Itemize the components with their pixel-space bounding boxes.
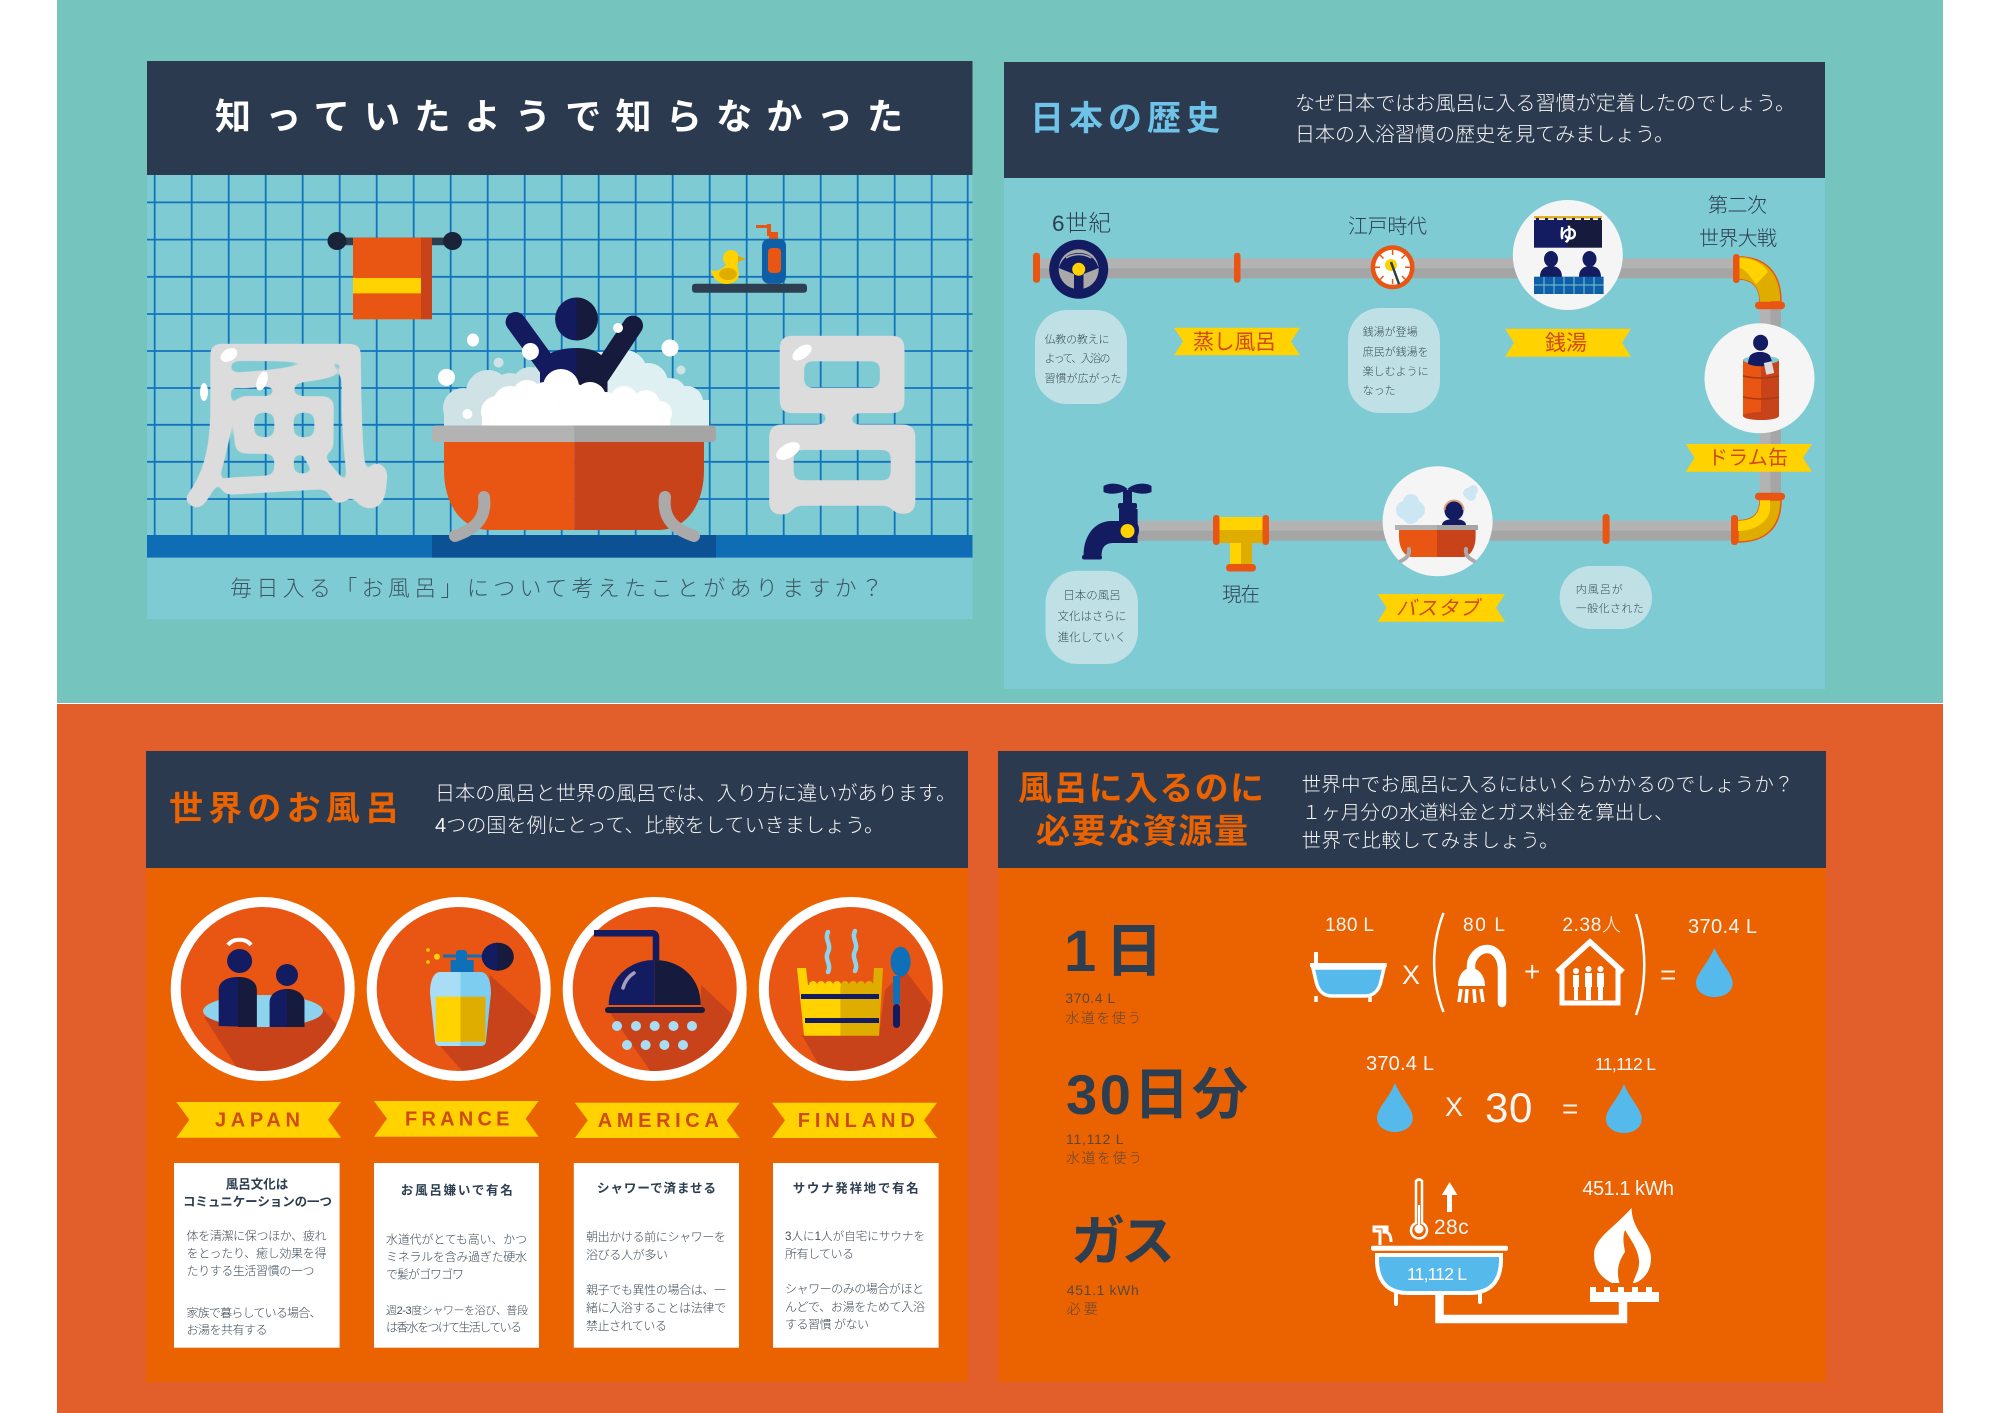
history header: なぜ日本ではお風呂に入る習慣が定着したのでしょう。: [1295, 92, 1795, 115]
icon: towel rail: [328, 232, 462, 319]
diagram: gas heating: 28c: [1434, 1216, 1469, 1239]
block: ガス: 必要: [1067, 1301, 1098, 1317]
icon: valve wheel: [1049, 240, 1108, 299]
ribbon: バスタブ: [1378, 594, 1505, 622]
bubble: 日本の風呂: [1046, 571, 1138, 664]
bubble: 銭湯が登場: [1348, 308, 1440, 413]
icon: Finland: [764, 902, 950, 1085]
card: Finland: [773, 1163, 939, 1348]
card: America: 緒に入浴することは法律で: [586, 1301, 726, 1315]
icon: bathtub circle: [1383, 466, 1493, 576]
ribbon: JAPAN: [176, 1102, 341, 1138]
card: America: シャワーで済ませる: [597, 1180, 716, 1196]
block: ガス: [1067, 1212, 1175, 1317]
title bar: 知っていたようで知らなかった: [215, 96, 903, 137]
icon: shower: [1458, 949, 1502, 1003]
card: France: 週2-3度シャワーを浴び、普段: [386, 1304, 528, 1317]
card: Finland: 3人に1人が自宅にサウナを: [785, 1230, 925, 1243]
bubble: 仏教: [1035, 310, 1127, 404]
ribbon: FRANCE: FRANCE: [405, 1108, 510, 1130]
bubble: 銭湯が登場: 楽しむように: [1363, 365, 1429, 378]
label: 第二次世界大戦: 世界大戦: [1699, 227, 1777, 250]
bubble: 仏教: 仏教の教えに: [1044, 332, 1110, 346]
card: America: 朝出かける前にシャワーを: [586, 1230, 726, 1244]
resources header: 世界で比較してみましょう。: [1302, 830, 1559, 852]
bubble: 内風呂: 内風呂が: [1576, 583, 1623, 596]
icon: water drop: [1696, 948, 1733, 997]
resources header: 風呂に入るのに: [1018, 770, 1264, 808]
ribbon: FINLAND: FINLAND: [798, 1110, 915, 1132]
bubble: 仏教: よって、入浴の: [1044, 352, 1110, 365]
card: Japan: をとったり、癒し効果を得: [186, 1246, 326, 1260]
formula: daily water: =: [1660, 959, 1676, 990]
elbow pipe bottom: [1731, 493, 1785, 545]
card: Japan: お湯を共有する: [186, 1323, 268, 1337]
formula: monthly water: X: [1445, 1092, 1463, 1122]
history header: 日本の入浴習慣の歴史を見てみましょう。: [1295, 123, 1674, 146]
icon: white tub: [1310, 952, 1387, 1002]
icon: faucet: [1082, 484, 1152, 560]
card: Japan: [174, 1163, 340, 1348]
card: Finland: する習慣 がない: [785, 1318, 869, 1332]
ribbon: 銭湯: 銭湯: [1545, 332, 1587, 355]
card: France: ミネラルを含み過ぎた硬水: [386, 1250, 527, 1264]
card: Japan: 風呂文化は: [226, 1176, 289, 1192]
ribbon: 銭湯: [1505, 329, 1631, 357]
world header: 4つの国を例にとって、比較をしていきましょう。: [435, 814, 884, 837]
formula: daily water: +: [1524, 956, 1540, 987]
panel: history of Japan: [1004, 62, 1825, 689]
card: France: 水道代がとても高い、かつ: [386, 1232, 527, 1246]
big kanji 風: 風: [181, 324, 391, 531]
formula: daily water: 180 L: [1325, 915, 1374, 936]
formula: daily water: [1310, 913, 1757, 1015]
block: 1日: 水道を使う: [1065, 1010, 1141, 1026]
formula: monthly water: 30: [1485, 1084, 1532, 1131]
panel: world baths: [146, 751, 968, 1382]
card: Finland: シャワーのみの場合がほと: [785, 1282, 924, 1296]
bubble: 内風呂: 一般化された: [1576, 602, 1644, 615]
card: Japan: 体を清潔に保つほか、疲れ: [186, 1229, 326, 1243]
icon: drop left: [1377, 1083, 1413, 1132]
subtitle: 毎日入る「お風呂」について考えたことがありますか？: [230, 576, 883, 601]
card: Japan: たりする生活習慣の一つ: [186, 1264, 314, 1278]
ribbon: AMERICA: [575, 1103, 740, 1138]
label: 江戸時代: 江戸時代: [1348, 215, 1427, 238]
panel: hero bath: [147, 61, 972, 619]
icon: house: [1557, 942, 1623, 1003]
card: America: 禁止されている: [586, 1319, 667, 1333]
bubble: 銭湯が登場: なった: [1363, 384, 1396, 397]
formula: daily water: 370.4 L: [1688, 916, 1757, 938]
card: America: 親子でも異性の場合は、一: [586, 1283, 726, 1297]
card: France: お風呂嫌いで有名: [401, 1182, 513, 1198]
icon: bathtub: [432, 426, 716, 536]
block: 30日分: 30日分: [1066, 1063, 1248, 1126]
formula: monthly water: =: [1562, 1093, 1578, 1124]
world header: 日本の風呂と世界の風呂では、入り方に違いがあります。: [435, 782, 956, 805]
ribbon: FINLAND: [772, 1103, 937, 1138]
big kanji 呂: 呂: [753, 321, 931, 533]
icon: thermometer: [1411, 1180, 1427, 1238]
card: France: は香水をつけて生活している: [386, 1320, 522, 1334]
world header: 世界のお風呂: [169, 790, 399, 828]
bubble: 銭湯が登場: 銭湯が登場: [1363, 326, 1418, 338]
hero tile wall: [147, 175, 972, 558]
block: 30日分: 11,112 L: [1066, 1131, 1124, 1147]
bubble: 銭湯が登場: 庶民が銭湯を: [1363, 346, 1429, 358]
formula: daily water: 2.38人: [1562, 915, 1621, 936]
block: 30日分: 水道を使う: [1066, 1150, 1142, 1166]
formula: daily water: X: [1402, 960, 1420, 990]
resources header: １ヶ月分の水道料金とガス料金を算出し、: [1302, 802, 1674, 824]
diagram: gas heating: [1371, 1178, 1674, 1319]
formula: monthly water: 11,112 L: [1595, 1054, 1656, 1074]
icon: flame: [1594, 1208, 1651, 1285]
card: Finland: サウナ発祥地で有名: [793, 1180, 919, 1196]
resources header: 世界中でお風呂に入るにはいくらかかるのでしょうか？: [1302, 774, 1794, 796]
ribbon: FRANCE: [374, 1101, 539, 1137]
icon: drum can bath: [1704, 323, 1814, 433]
icon: burner: [1590, 1287, 1659, 1302]
card: America: [574, 1163, 739, 1348]
pipeline: [1033, 253, 1781, 544]
icon: sento circle: [1513, 200, 1623, 310]
card: Japan: 家族で暮らしている場合、: [186, 1306, 322, 1320]
label: 第二次世界大戦: [1699, 194, 1777, 250]
label: 第二次世界大戦: 第二次: [1708, 194, 1767, 217]
card: France: で髪がゴワゴワ: [386, 1266, 464, 1282]
ribbon: バスタブ: バスタブ: [1396, 597, 1482, 620]
card: Finland: んどで、お湯をためて入浴: [785, 1300, 925, 1314]
label: 6世紀: 6世紀: [1052, 211, 1111, 236]
icon: shelf with duck and soap: [692, 224, 807, 293]
icon: gas pipe: [1440, 1295, 1623, 1319]
icon: up arrow: [1442, 1182, 1457, 1212]
card: America: 浴びる人が多い: [586, 1248, 668, 1262]
resources header: 必要な資源量: [1036, 813, 1248, 851]
block: 1日: 370.4 L: [1065, 990, 1116, 1006]
world header: [146, 751, 968, 868]
block: 1日: [1064, 919, 1163, 1026]
ribbon: AMERICA: AMERICA: [598, 1110, 719, 1132]
icon: T pipe: [1213, 515, 1269, 572]
block: 1日: 1日: [1064, 919, 1163, 984]
bubble: 仏教: 習慣が広がった: [1044, 372, 1122, 385]
card: Finland: 所有している: [785, 1247, 854, 1261]
icon: Japan: [176, 902, 350, 1080]
elbow pipe top: [1733, 254, 1785, 309]
bubble: 日本の風呂: 日本の風呂: [1063, 589, 1121, 602]
bubble: 内風呂: [1560, 566, 1652, 629]
card: France: [374, 1163, 539, 1348]
diagram: gas heating: 451.1 kWh: [1582, 1178, 1674, 1200]
formula: daily water: 80 L: [1463, 915, 1505, 936]
block: ガス: ガス: [1071, 1212, 1175, 1272]
panel: resources: [998, 751, 1826, 1382]
icon: America: [568, 902, 760, 1085]
bubble: 日本の風呂: 文化はさらに: [1058, 610, 1126, 623]
icon: drop right: [1606, 1084, 1642, 1133]
card: Japan: コミュニケーションの一つ: [183, 1195, 332, 1209]
icon: sento circle: ゆ: [1558, 224, 1578, 246]
ribbon: ドラム缶: [1686, 444, 1812, 472]
ribbon: 蒸し風呂: [1174, 328, 1300, 355]
icon: person in tub: [432, 298, 716, 536]
block: 30日分: [1066, 1063, 1248, 1166]
ribbon: JAPAN: JAPAN: [215, 1110, 300, 1132]
icon: pressure gauge: [1371, 245, 1415, 289]
ribbon: 蒸し風呂: 蒸し風呂: [1193, 331, 1276, 354]
history header: [1004, 62, 1825, 178]
history header: 日本の歴史: [1030, 100, 1220, 138]
ribbon: ドラム缶: ドラム缶: [1708, 446, 1788, 470]
block: ガス: 451.1 kWh: [1067, 1282, 1139, 1298]
icon: tub with water: [1371, 1227, 1508, 1304]
label: 現在: 現在: [1222, 584, 1260, 606]
resources header: [998, 751, 1826, 868]
icon: France: [372, 902, 550, 1080]
title bar: [147, 61, 972, 175]
formula: monthly water: 370.4 L: [1366, 1053, 1434, 1075]
formula: monthly water: [1366, 1053, 1656, 1133]
icon: tub with water: 11,112 L: [1407, 1264, 1467, 1284]
bubble: 日本の風呂: 進化していく: [1058, 631, 1126, 644]
